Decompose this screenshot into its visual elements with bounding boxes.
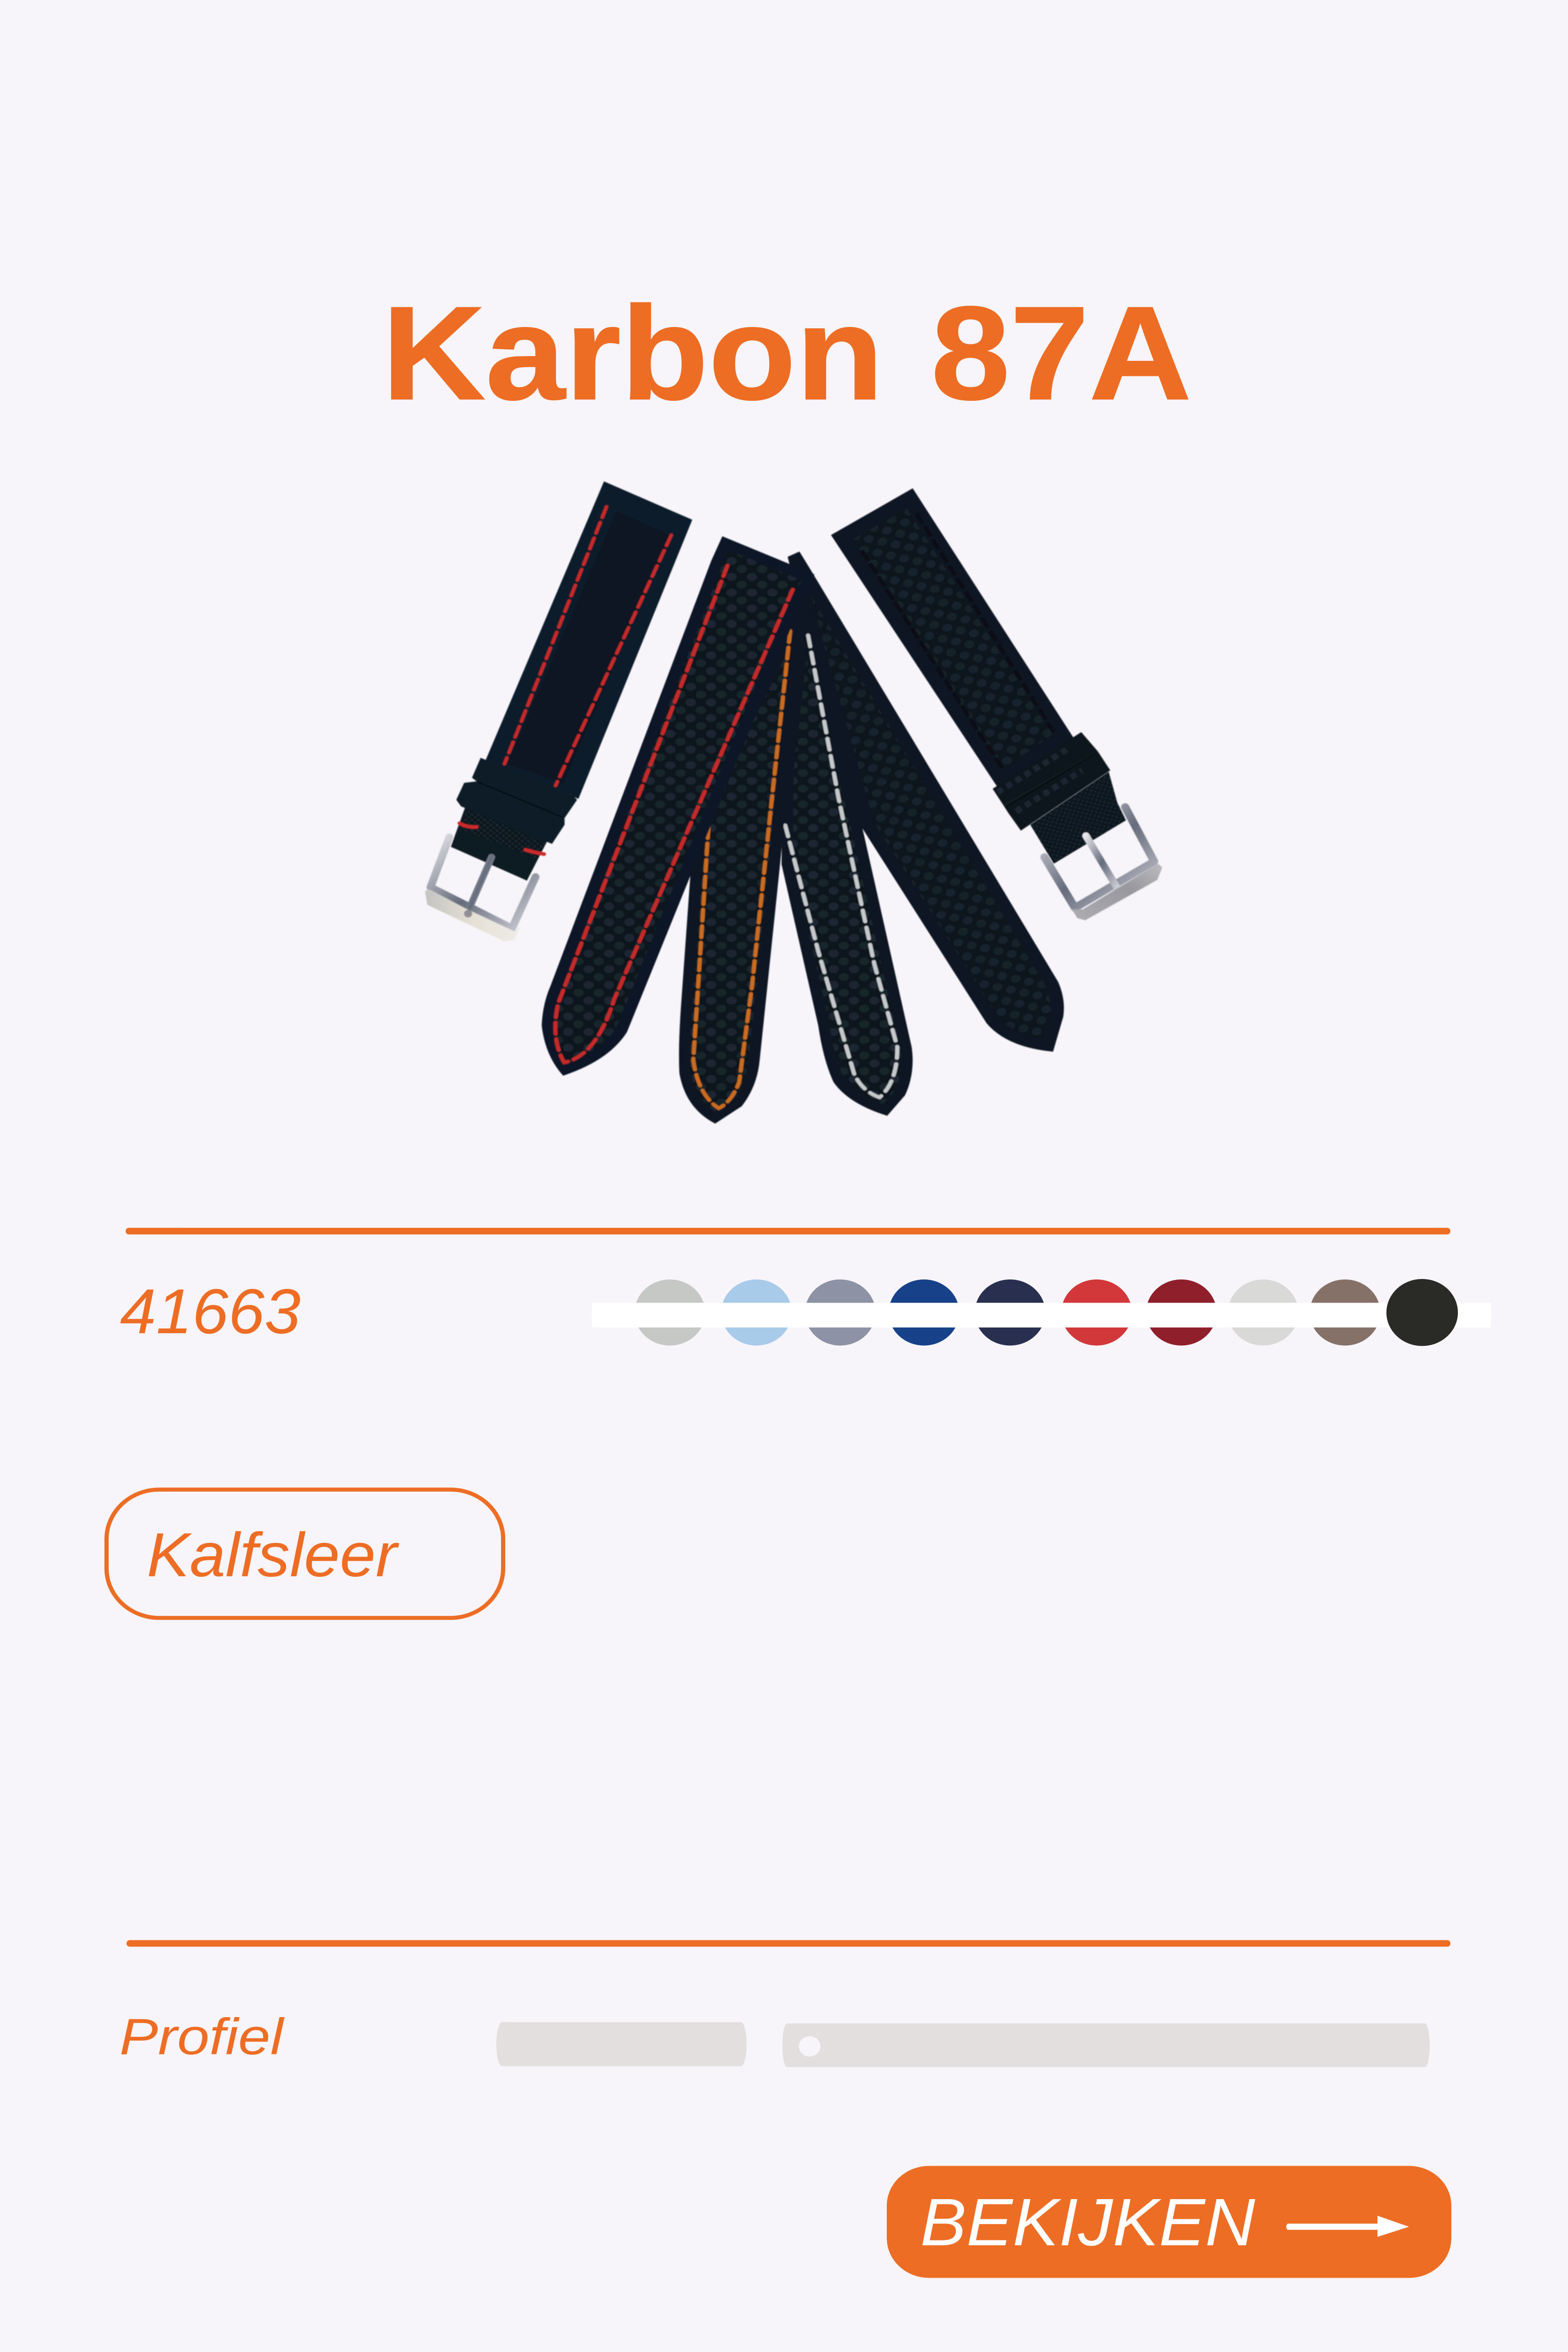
divider top — [126, 1228, 1450, 1234]
arrow — [1286, 2216, 1409, 2237]
buckle frame — [430, 837, 535, 929]
profile bar short — [496, 2022, 747, 2066]
view button — [887, 2166, 1451, 2278]
title — [382, 279, 1192, 428]
profile bar long — [782, 2024, 1430, 2067]
profile label: Profiel — [119, 2008, 285, 2065]
colour swatches — [592, 1279, 1491, 1346]
strap: left top with red stitch — [484, 481, 692, 799]
strap: right carbon strap top — [831, 488, 1074, 790]
divider bottom — [127, 1940, 1450, 1947]
strap: right keepers and buckle — [993, 732, 1162, 920]
product photo: watch straps — [425, 481, 1162, 1124]
strap: orange stitch — [679, 589, 805, 1124]
view button: BEKIJKEN — [920, 2185, 1256, 2260]
product card — [104, 302, 1491, 2278]
material tag: Kalfsleer — [147, 1520, 399, 1589]
strap: left keepers and buckle — [425, 758, 577, 942]
buckle frame — [1044, 807, 1154, 908]
title: Karbon — [382, 279, 883, 428]
strap: white stitch — [781, 589, 913, 1116]
strap: red stitch long — [542, 536, 814, 1076]
strap: long black tonal stitch — [484, 481, 1064, 1124]
title: 87A — [931, 279, 1192, 428]
article number: 41663 — [120, 1276, 301, 1347]
material tag — [106, 1490, 503, 1618]
